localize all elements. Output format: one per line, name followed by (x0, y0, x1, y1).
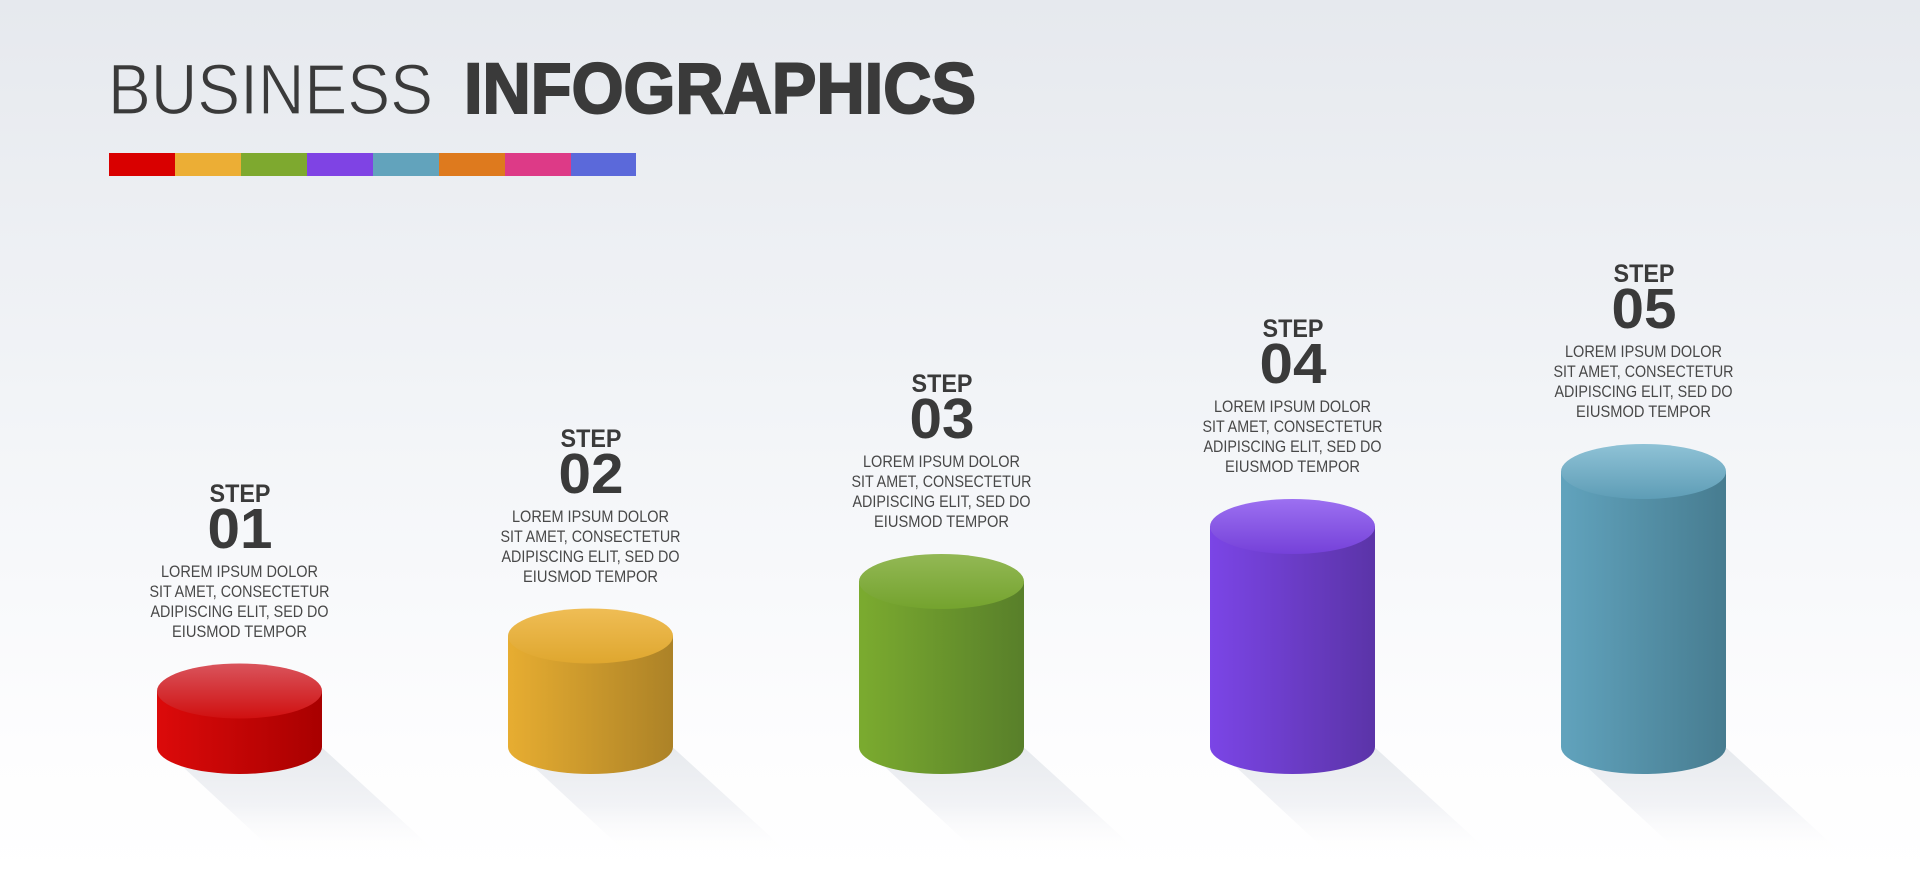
shadow 04 (1228, 748, 1490, 853)
panel: step 01 (150, 480, 438, 853)
text: step 02: SIT AMET, CONSECTETUR (500, 527, 680, 546)
heading: step 04: STEP (1262, 315, 1324, 343)
text: step 02: LOREM IPSUM DOLOR (512, 507, 669, 526)
heading: step 05: 05 (1612, 277, 1676, 341)
heading: step 02: 02 (558, 442, 624, 506)
shadow 01 (176, 748, 438, 853)
text: step 05: LOREM IPSUM DOLOR (1565, 342, 1722, 361)
text: step 03: EIUSMOD TEMPOR (874, 512, 1009, 531)
shadow 05 (1580, 748, 1842, 853)
text: step 01: LOREM IPSUM DOLOR (161, 562, 318, 581)
text: step 03: ADIPISCING ELIT, SED DO (852, 492, 1030, 511)
text: step 05 (1554, 342, 1734, 421)
title (108, 50, 976, 130)
text: step 03: SIT AMET, CONSECTETUR (852, 472, 1032, 491)
panel: step 03 (852, 370, 1140, 853)
cylinder 05 (1561, 444, 1726, 774)
text: step 02: EIUSMOD TEMPOR (523, 567, 658, 586)
shadow 02 (526, 748, 788, 853)
text: step 02 (500, 507, 680, 586)
text: step 01: ADIPISCING ELIT, SED DO (150, 602, 328, 621)
text: step 04 (1202, 397, 1382, 476)
heading: step 03: STEP (912, 370, 972, 398)
text: step 02: ADIPISCING ELIT, SED DO (502, 547, 680, 566)
text: step 04: LOREM IPSUM DOLOR (1214, 397, 1371, 416)
title: bold word: INFOGRAPHICS (464, 50, 976, 129)
text: step 05: ADIPISCING ELIT, SED DO (1554, 382, 1732, 401)
text: step 05: SIT AMET, CONSECTETUR (1554, 362, 1734, 381)
text: step 04: ADIPISCING ELIT, SED DO (1204, 437, 1382, 456)
heading: step 02: STEP (560, 425, 622, 453)
text: step 01: SIT AMET, CONSECTETUR (150, 582, 330, 601)
text: step 05: EIUSMOD TEMPOR (1576, 402, 1711, 421)
heading: step 01: STEP (210, 480, 270, 508)
text: step 01: EIUSMOD TEMPOR (172, 622, 307, 641)
colour strip (109, 153, 636, 176)
panel: step 05 (1554, 260, 1842, 853)
text: step 04: EIUSMOD TEMPOR (1225, 457, 1360, 476)
text: step 03 (852, 452, 1032, 531)
panel: step 04 (1202, 315, 1490, 853)
title: light word: BUSINESS (108, 51, 433, 130)
heading: step 01: 01 (208, 497, 272, 561)
text: step 03: LOREM IPSUM DOLOR (863, 452, 1020, 471)
shadow 03 (878, 748, 1140, 853)
heading: step 03: 03 (910, 387, 974, 451)
text: step 04: SIT AMET, CONSECTETUR (1202, 417, 1382, 436)
cylinder 04 (1210, 499, 1375, 774)
heading: step 05: STEP (1614, 260, 1674, 288)
cylinder 02 (508, 608, 673, 774)
cylinder 03 (859, 554, 1024, 774)
cylinder 01 (157, 664, 322, 774)
heading: step 04: 04 (1260, 332, 1327, 396)
panel: step 02 (500, 425, 788, 853)
text: step 01 (150, 562, 330, 641)
